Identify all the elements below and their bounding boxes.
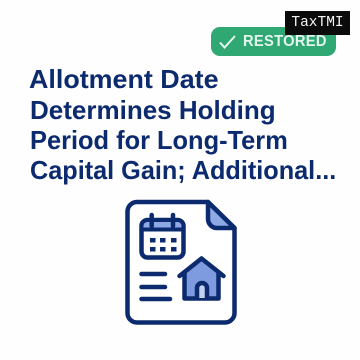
title: Period for Long-Term — [30, 125, 288, 155]
title: Capital Gain; Additional... — [30, 155, 336, 185]
badge: restored — [211, 27, 336, 56]
folded corner — [208, 202, 234, 228]
title: Allotment Date — [29, 64, 219, 94]
title — [29, 64, 336, 185]
badge label: RESTORED — [243, 33, 327, 50]
title: Determines Holding — [30, 95, 276, 125]
house — [180, 258, 224, 298]
watermark: TaxTMI: TaxTMI — [291, 15, 344, 31]
text lines — [142, 274, 170, 299]
icon: document with calendar and house — [125, 200, 237, 325]
calendar — [142, 215, 184, 258]
icon: check mark — [219, 35, 236, 49]
document outline — [128, 202, 234, 322]
watermark: TaxTMI — [285, 11, 350, 35]
